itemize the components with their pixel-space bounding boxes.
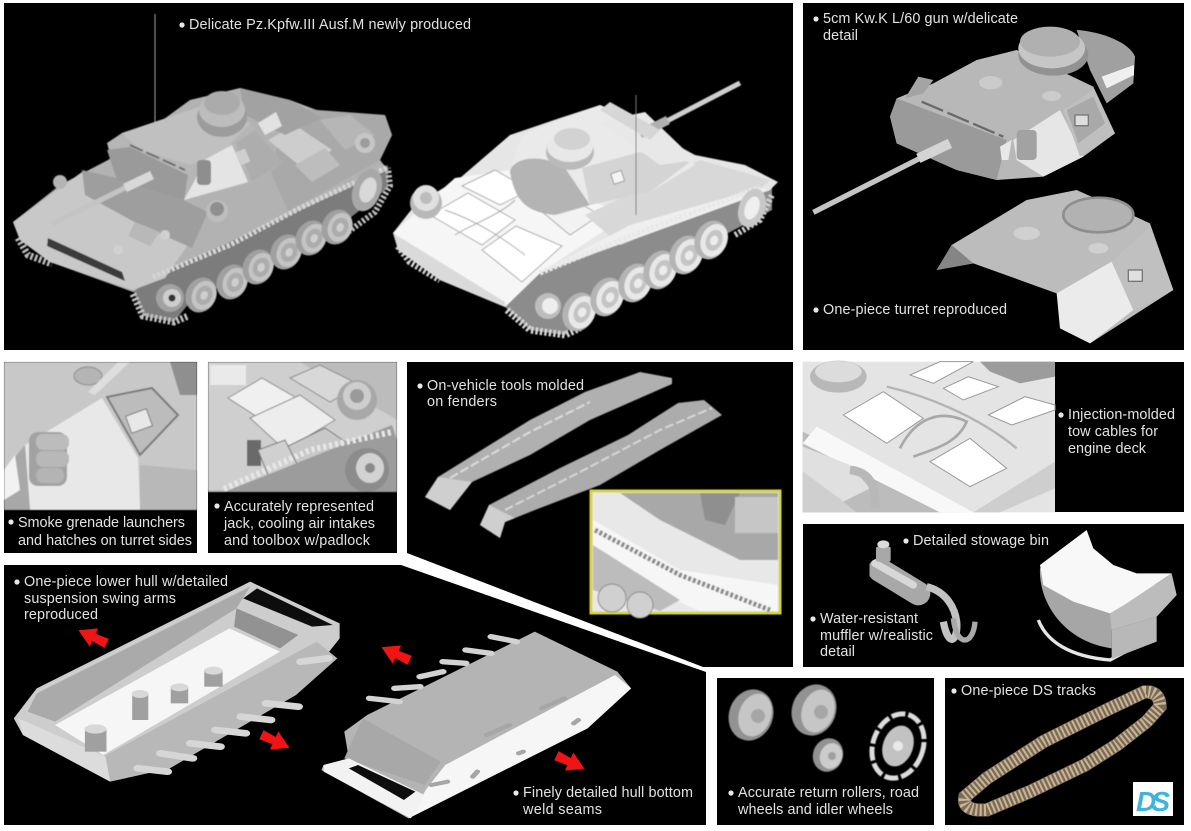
panel: fenders [407, 362, 793, 667]
inset: close-up [591, 491, 780, 618]
panel: jack and toolbox [208, 362, 397, 553]
caption: gun: detail [823, 28, 858, 44]
turret [510, 105, 695, 215]
caption: gun: 5cm Kw.K L/60 gun w/delicate [823, 11, 1018, 27]
caption: stowage: Detailed stowage bin [913, 533, 1049, 549]
caption: jack [214, 499, 375, 549]
panel: smoke grenade launchers [4, 362, 197, 553]
hull interior part [14, 582, 340, 782]
panel: main tank views [4, 3, 793, 350]
caption: smoke: Smoke grenade launchers [18, 515, 185, 531]
caption: tracks: One-piece DS tracks [961, 683, 1096, 699]
detail image: turret side [4, 362, 197, 510]
caption: tools [417, 378, 584, 410]
caption: smoke [8, 515, 192, 549]
caption: hull bottom: Finely detailed hull bottom [523, 785, 693, 801]
tank model: front view [13, 14, 392, 322]
caption: lower hull [14, 574, 228, 623]
caption: jack: jack, cooling air intakes [223, 516, 375, 532]
caption: delicate: Delicate Pz.Kpfw.III Ausf.M newly produced [189, 17, 471, 33]
stowage [410, 187, 442, 219]
front deck and glacis [13, 172, 205, 290]
red arrows [74, 621, 589, 778]
DS track loop [965, 692, 1160, 810]
fender parts [425, 372, 722, 538]
running gear [400, 185, 772, 335]
caption: hull bottom: weld seams [522, 802, 602, 818]
caption: muffler: detail [820, 644, 855, 660]
teeth on track [153, 167, 388, 277]
detail image: engine deck [208, 362, 397, 492]
caption: tow cables [1058, 407, 1175, 457]
caption: wheels: Accurate return rollers, road [738, 785, 919, 801]
panel: muffler and bin [803, 524, 1184, 667]
road wheels [556, 287, 602, 337]
caption: gun [813, 11, 1018, 44]
cupola [546, 134, 594, 170]
rear deck [393, 170, 628, 307]
gun [52, 183, 135, 224]
one-piece turret part [937, 190, 1173, 343]
DS logo: DS [1136, 786, 1170, 817]
panel: tracks [945, 678, 1184, 825]
track and running gear [20, 165, 388, 322]
panel: wheels [717, 678, 934, 825]
caption: jack: Accurately represented [224, 499, 374, 515]
caption: tow cables: tow cables for [1068, 424, 1158, 440]
caption: hull bottom [513, 785, 693, 818]
cupola [197, 97, 247, 137]
caption: muffler: Water-resistant [820, 611, 918, 627]
hull [393, 105, 778, 307]
panel: turret [803, 3, 1184, 350]
panel: tow cables [803, 361, 1184, 512]
hull [13, 88, 392, 292]
caption: tow cables: engine deck [1068, 441, 1147, 457]
stowage bin [1038, 530, 1177, 660]
tank model: rear view [393, 83, 778, 337]
caption: tow cables: Injection-molded [1068, 407, 1175, 423]
caption: lower hull: suspension swing arms [24, 591, 176, 607]
caption: tools: on fenders [427, 394, 497, 410]
panel: lower hull [4, 565, 706, 825]
caption: turret: One-piece turret reproduced [823, 302, 1007, 318]
gun [665, 83, 740, 122]
muffler [875, 540, 975, 640]
caption: jack: and toolbox w/padlock [224, 533, 371, 549]
wheel parts [721, 678, 933, 786]
caption: smoke: and hatches on turret sides [18, 533, 192, 549]
caption: wheels [728, 785, 919, 818]
road wheels [180, 272, 222, 318]
turret with gun [813, 27, 1135, 212]
turret [107, 107, 283, 200]
caption: wheels: wheels and idler wheels [737, 802, 893, 818]
caption: lower hull: reproduced [24, 607, 98, 623]
engine deck [270, 108, 392, 212]
caption: muffler [810, 611, 933, 660]
detail image: engine deck [803, 361, 1055, 512]
caption: lower hull: One-piece lower hull w/detailed [24, 574, 228, 590]
caption: tools: On-vehicle tools molded [427, 378, 584, 394]
caption: muffler: muffler w/realistic [820, 628, 933, 644]
hull bottom part [321, 632, 631, 818]
